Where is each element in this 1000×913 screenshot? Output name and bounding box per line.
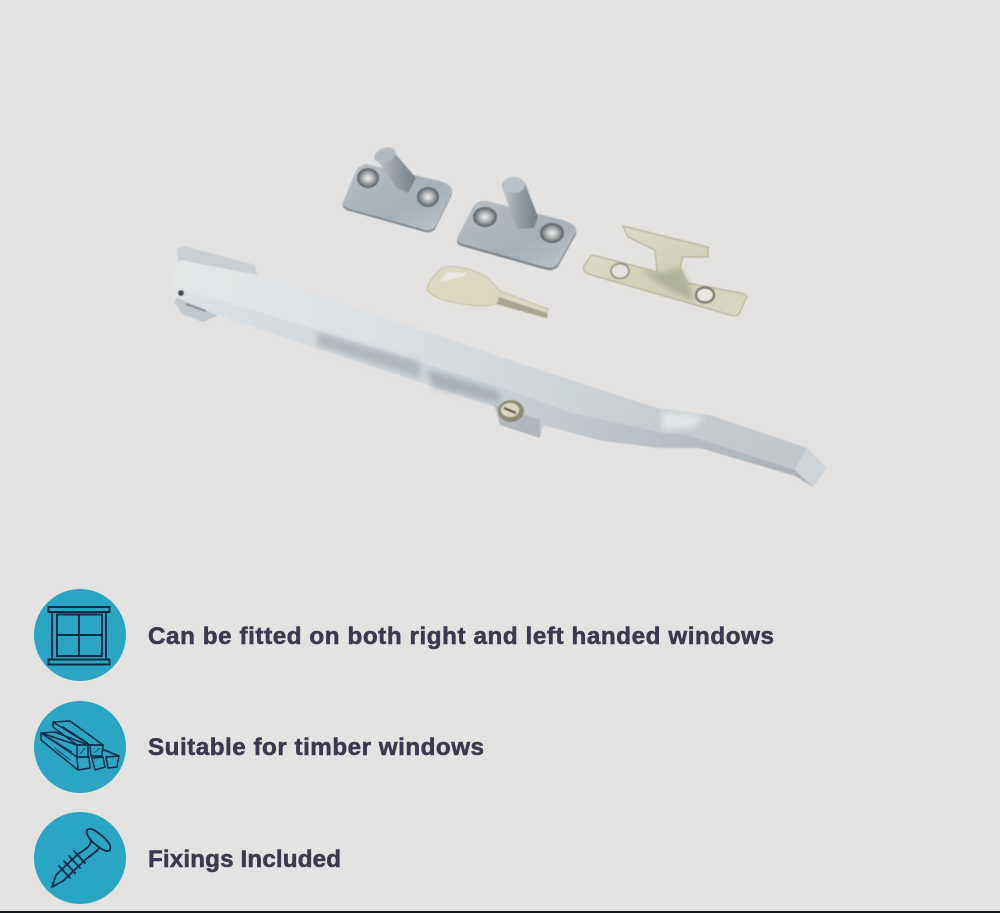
text: timber windows: Suitable for timber windows	[148, 734, 484, 761]
icon: timber	[34, 701, 126, 793]
stay shadow recesses	[317, 332, 420, 378]
icon: screw	[34, 812, 126, 904]
locking pin bracket, right	[457, 177, 576, 270]
bottom rule	[0, 911, 1000, 913]
text: handed windows: Can be fitted on both right and left handed windows	[148, 623, 774, 650]
stay lock plate	[495, 405, 540, 438]
icon: window	[34, 589, 126, 681]
stay tip	[795, 448, 827, 487]
text: fixings included: Fixings Included	[148, 846, 341, 873]
stay bend highlight	[662, 411, 705, 430]
product photo: window stay with key and fittings	[170, 145, 827, 487]
pivot hole	[178, 290, 184, 296]
lock cylinder	[498, 400, 524, 422]
stay lower hinge plate	[174, 296, 220, 322]
feature row: timber windows	[34, 701, 484, 793]
window stay bar	[170, 246, 827, 487]
hinge slot	[186, 304, 206, 311]
feature row: fixings	[34, 812, 341, 904]
stay top face	[170, 260, 807, 470]
locking pin bracket, left	[343, 145, 452, 232]
stay lower face	[172, 278, 813, 487]
key	[427, 266, 548, 318]
striker plate	[584, 226, 747, 316]
stay back hinge plate	[177, 246, 257, 275]
feature row: left and right handed windows	[34, 589, 774, 681]
